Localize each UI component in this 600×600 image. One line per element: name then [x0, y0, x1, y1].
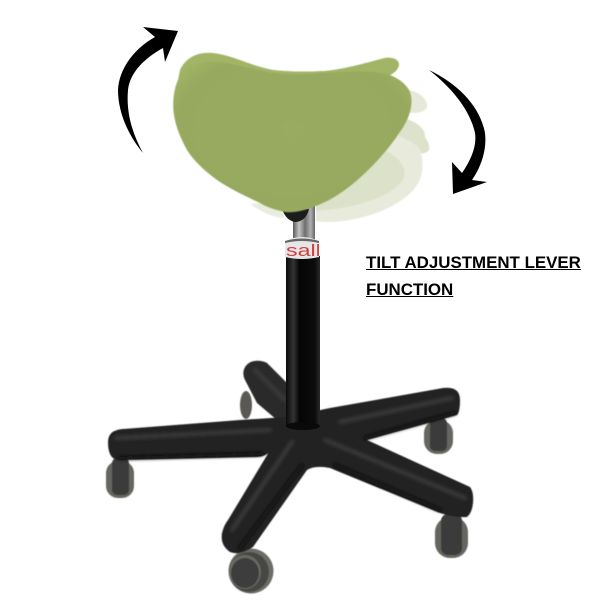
- base: right rear caster: [424, 418, 453, 454]
- stool column: branded label collar: salli: [286, 241, 326, 260]
- stool column: branded label collar: [285, 237, 319, 259]
- stool column: collar ring at base: [286, 422, 320, 430]
- illustration: tilt-adjustable saddle stool: [105, 27, 487, 594]
- base: back leg: [243, 361, 290, 420]
- label: tilt adjustment lever function: [366, 253, 581, 299]
- label: tilt adjustment lever function: TILT ADJUSTMENT LEVER: [366, 253, 581, 272]
- base: leg highlights: [116, 370, 465, 530]
- saddle seat: green upholstered cushion: [173, 53, 412, 212]
- stool column: chrome gas lift: [293, 205, 315, 241]
- seat mount: black joint: [282, 209, 309, 222]
- saddle seat: top edge highlight: [180, 53, 399, 75]
- label: tilt adjustment lever function: FUNCTION: [366, 280, 453, 299]
- stool column: black lower tube: [286, 256, 320, 426]
- base: back caster: [240, 391, 252, 419]
- arrow: tilt forward, curved down: [429, 70, 487, 194]
- ghost seat positions: [250, 90, 429, 222]
- base: leg shadow folds: [120, 413, 455, 548]
- base: right front caster: [435, 514, 468, 558]
- arrow: tilt back, curved up: [118, 27, 178, 153]
- base: front caster: [228, 548, 274, 594]
- base: five-star legs: [108, 388, 473, 553]
- base: left caster: [106, 458, 134, 498]
